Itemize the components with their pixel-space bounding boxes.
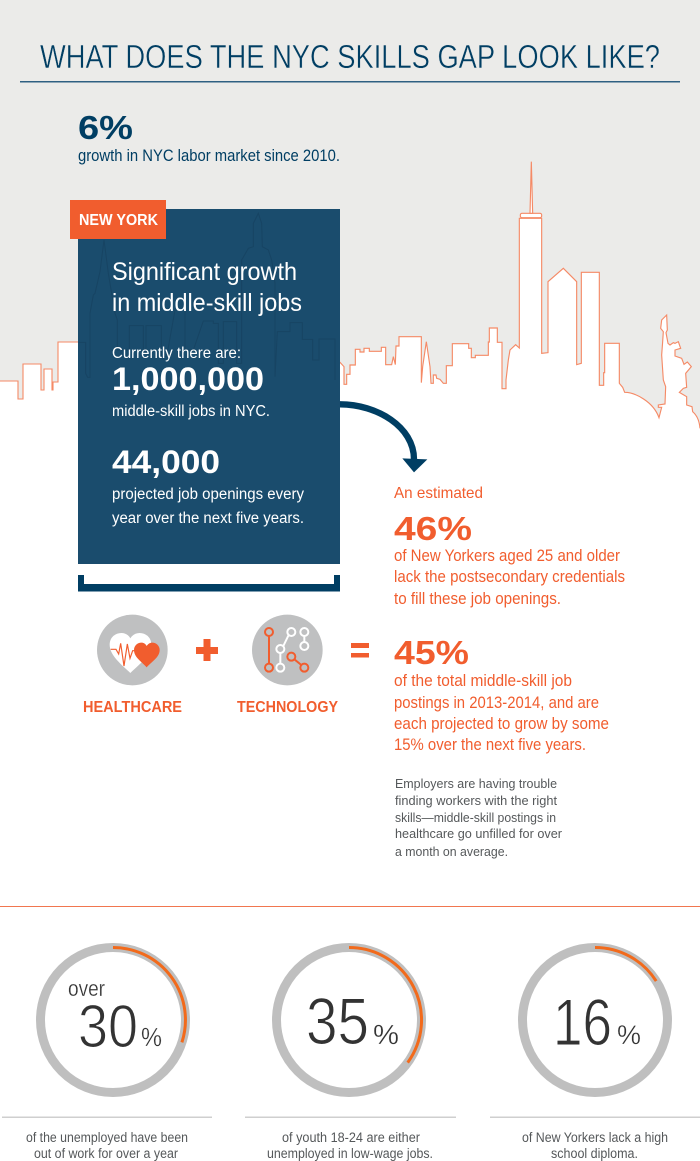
stat: 46% lack credentials: of New Yorkers aged 25 and older bbox=[394, 547, 620, 565]
stat: over 30%: % bbox=[141, 1022, 162, 1052]
ring chart 35% bbox=[276, 948, 422, 1092]
panel heading bbox=[112, 258, 302, 317]
panel heading: Significant growth bbox=[112, 258, 297, 286]
stat: 16%: % bbox=[617, 1020, 641, 1050]
ring chart 30% bbox=[40, 948, 186, 1092]
stat: 16%: 16 bbox=[553, 985, 612, 1059]
stat: 46% lack credentials: lack the postsecondary credentials bbox=[394, 568, 625, 586]
stat: 35%: 35 bbox=[306, 984, 369, 1058]
icon: technology bbox=[252, 615, 323, 685]
stat: 44,000 openings: projected job openings every bbox=[112, 486, 304, 503]
note: employers: finding workers with the right bbox=[395, 793, 557, 808]
stat: 45% of postings: of the total middle-skill job bbox=[394, 672, 572, 690]
equals sign bbox=[351, 643, 369, 658]
stat: 1,000,000 jobs: middle-skill jobs in NYC. bbox=[112, 403, 270, 420]
skyline left of box bbox=[0, 342, 80, 445]
panel: New York middle-skill jobs bbox=[78, 209, 340, 564]
tag: New York: NEW YORK bbox=[79, 212, 158, 229]
faint skyline in panel bbox=[78, 213, 335, 380]
note: employers bbox=[395, 776, 563, 859]
stat: 44,000 openings bbox=[112, 444, 304, 527]
stat: 35%: % bbox=[373, 1019, 399, 1050]
stat: over 30%: over bbox=[68, 976, 105, 1001]
stat: 35% bbox=[276, 948, 422, 1092]
stat: 6% growth bbox=[78, 109, 340, 165]
tag: New York bbox=[70, 200, 166, 239]
stat: 45% of postings: each projected to grow by some bbox=[394, 715, 609, 733]
stat: over 30% bbox=[40, 948, 186, 1092]
caption: 16% bbox=[522, 1130, 668, 1161]
caption: 30%: of the unemployed have been bbox=[26, 1130, 188, 1145]
icon: healthcare bbox=[97, 615, 168, 685]
note: employers: skills—middle-skill postings in bbox=[395, 810, 556, 825]
panel: grey sky background bbox=[0, 0, 700, 440]
stat: 45% of postings: 45% bbox=[394, 634, 469, 671]
label: technology: TECHNOLOGY bbox=[237, 699, 338, 716]
stat: 46% lack credentials: to fill these job openings. bbox=[394, 590, 561, 608]
stat: 45% of postings bbox=[394, 634, 609, 754]
note: employers: healthcare go unfilled for over bbox=[395, 826, 563, 841]
plus sign bbox=[196, 639, 218, 661]
caption: 35%: unemployed in low-wage jobs. bbox=[267, 1146, 433, 1161]
stat: 1,000,000 jobs: 1,000,000 bbox=[112, 361, 264, 397]
stat: 1,000,000 jobs: Currently there are: bbox=[112, 345, 241, 362]
caption: 30%: out of work for over a year bbox=[34, 1146, 178, 1161]
bracket bbox=[78, 575, 340, 592]
stat: 45% of postings: 15% over the next five years. bbox=[394, 736, 586, 754]
stat: 46% lack credentials bbox=[394, 485, 625, 608]
stat: 46% lack credentials: 46% bbox=[394, 510, 472, 547]
caption: 16%: of New Yorkers lack a high bbox=[522, 1130, 668, 1145]
label: healthcare: HEALTHCARE bbox=[83, 699, 182, 716]
note: employers: Employers are having trouble bbox=[395, 776, 557, 791]
stat: 44,000 openings: 44,000 bbox=[112, 444, 220, 480]
stat: 6% growth: growth in NYC labor market since 2010. bbox=[78, 146, 340, 165]
stat: 45% of postings: postings in 2013-2014, and are bbox=[394, 694, 599, 712]
skyline right with World Trade Center and Statue of Liberty bbox=[336, 162, 700, 450]
stat: 6% growth: 6% bbox=[78, 109, 133, 146]
caption: 30% bbox=[26, 1130, 188, 1161]
stat: 46% lack credentials: An estimated bbox=[394, 485, 483, 502]
ring chart 16% bbox=[522, 948, 668, 1092]
note: employers: a month on average. bbox=[395, 844, 508, 859]
stat: 1,000,000 jobs bbox=[112, 345, 270, 420]
caption: 16%: school diploma. bbox=[551, 1146, 638, 1161]
stat: over 30%: 30 bbox=[78, 993, 138, 1060]
caption: 35%: of youth 18-24 are either bbox=[282, 1130, 420, 1145]
arrow bbox=[340, 404, 427, 472]
stat: 44,000 openings: year over the next five years. bbox=[112, 510, 304, 527]
stat: 16% bbox=[522, 948, 668, 1092]
panel heading: in middle-skill jobs bbox=[112, 289, 302, 317]
caption: 35% bbox=[267, 1130, 433, 1161]
